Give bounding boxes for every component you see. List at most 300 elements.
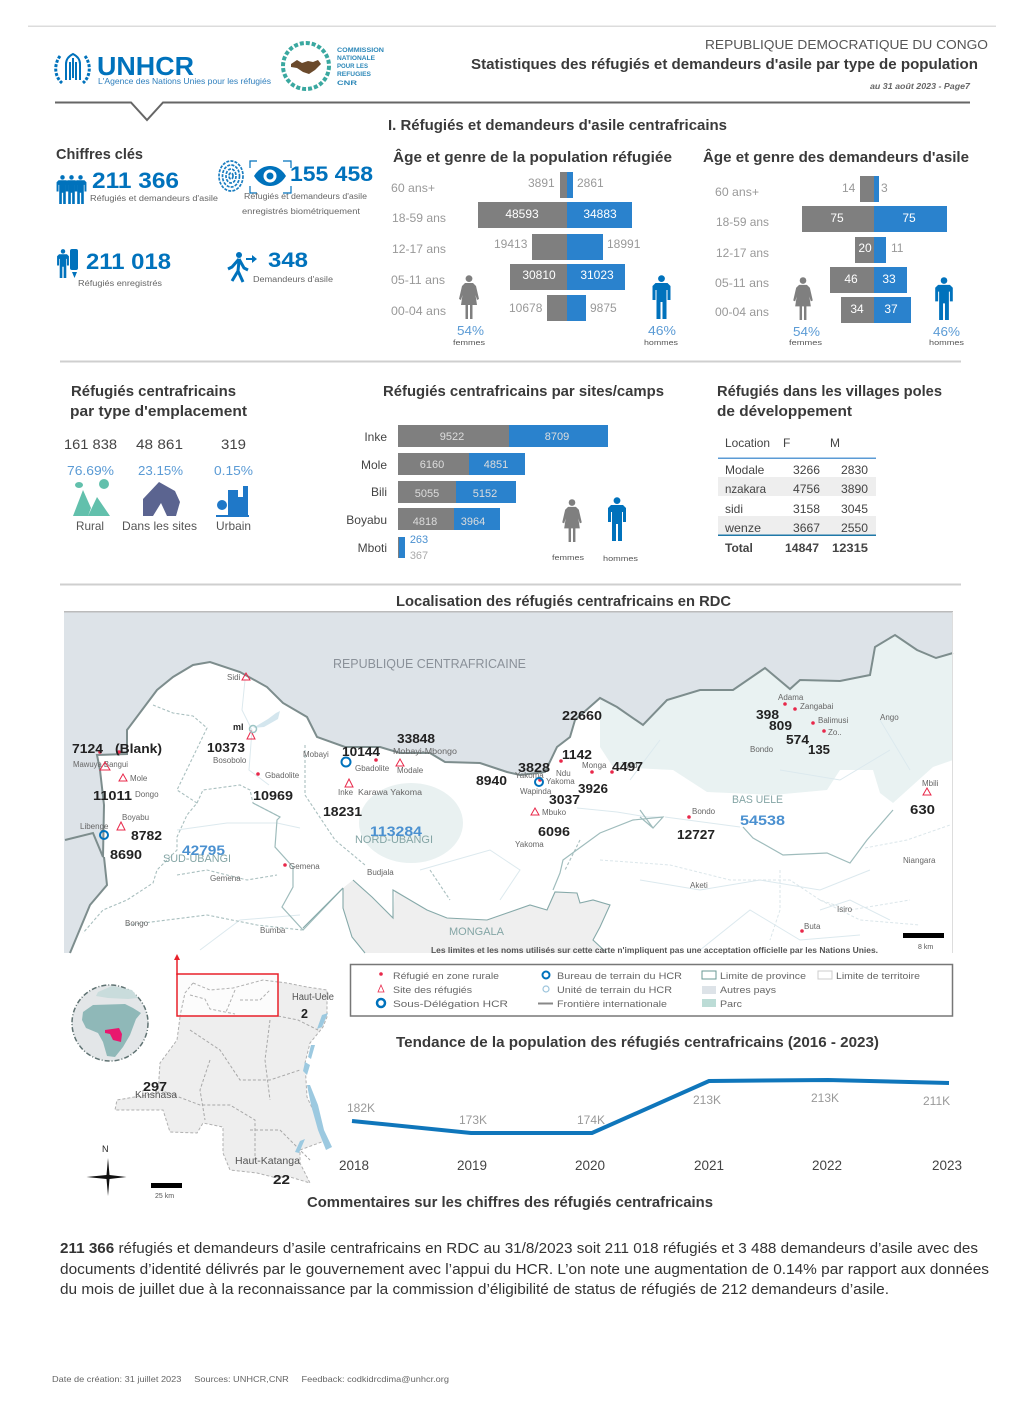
commission logo: POUR LES	[337, 63, 369, 70]
UNHCR logo: L'Agence des Nations Unies pour les réfugiés	[98, 76, 271, 86]
province figures: 113284	[370, 823, 422, 839]
place labels: Yakoma	[546, 777, 575, 786]
values: 46	[844, 272, 858, 286]
legend text: Frontière internationale	[557, 999, 667, 1010]
values: 367	[410, 550, 428, 562]
legend labels	[552, 553, 638, 563]
inset scale bar: 25 km	[155, 1193, 174, 1200]
map figures: 8690	[110, 848, 142, 862]
counts: 161 838	[64, 436, 117, 452]
values: 31023	[580, 268, 614, 282]
province labels: SUD-UBANGI	[163, 853, 231, 865]
years	[339, 1158, 962, 1173]
counts: 48 861	[136, 436, 183, 452]
heading: par type d'emplacement	[70, 403, 247, 420]
map figures: 22660	[562, 709, 602, 723]
province limits	[83, 705, 580, 933]
age labels: 18-59 ans	[392, 211, 446, 225]
heading: Réfugiés centrafricains par sites/camps	[383, 383, 664, 400]
icon: woman	[459, 275, 479, 319]
legend text: Réfugié en zone rurale	[393, 971, 499, 982]
map legend	[350, 964, 952, 1016]
place labels: Gemena	[210, 874, 241, 883]
column heads	[725, 436, 840, 450]
province labels: NORD-UBANGI	[355, 834, 433, 846]
map figures: 6096	[538, 825, 570, 839]
compass: N	[102, 1144, 108, 1154]
column heads: M	[830, 436, 840, 450]
legend text: Parc	[720, 999, 742, 1010]
section heading: I. Réfugiés et demandeurs d'asile centrafricains	[388, 117, 727, 134]
values: 3964	[461, 516, 485, 528]
footer: Date de création: 31 juillet 2023 Sources: UNHCR,CNR Feedback: codkidrcdima@unhcr.org	[52, 1374, 449, 1384]
years: 2022	[812, 1158, 842, 1173]
map figures: 4497	[612, 760, 643, 774]
place labels: Mole	[130, 774, 148, 783]
labels: Urbain	[216, 519, 251, 533]
values: 48593	[505, 207, 539, 221]
inset labels	[135, 992, 334, 1167]
icon: sites	[143, 482, 180, 516]
Bas Uele park	[600, 635, 953, 803]
panel: key figures: Réfugiés enregistrés	[78, 279, 162, 288]
scale bar: 8 km	[918, 944, 933, 951]
map figures: 18231	[323, 805, 362, 819]
site labels: Mole	[361, 458, 387, 472]
years: 2019	[457, 1158, 487, 1173]
map figures	[72, 708, 935, 862]
rows: Modale	[725, 463, 765, 477]
years: 2020	[575, 1158, 605, 1173]
values: 14	[842, 181, 856, 195]
lake	[253, 711, 280, 728]
place labels: Dongo	[135, 790, 159, 799]
heading: Réfugiés centrafricains	[71, 383, 236, 400]
inset labels: Kinshasa	[135, 1090, 177, 1101]
chart: refugee pyramid	[391, 148, 678, 347]
site labels: Bili	[371, 485, 387, 499]
share women: femmes	[789, 338, 822, 347]
heading: Âge et genre de la population réfugiée	[393, 148, 672, 166]
counts: 319	[221, 436, 246, 452]
rows: sidi	[725, 502, 743, 516]
place labels: Modale	[397, 766, 424, 775]
compass	[86, 1144, 126, 1196]
age labels: 18-59 ans	[716, 215, 769, 229]
paragraph	[60, 1241, 989, 1298]
panel: key figures: enregistrés biométriquement	[242, 207, 361, 216]
values: 20	[858, 241, 872, 255]
commission logo	[283, 43, 384, 89]
values: 3	[881, 181, 888, 195]
map heading: Localisation des réfugiés centrafricains en RDC	[396, 593, 731, 610]
icon: urban	[216, 486, 249, 517]
column heads: F	[783, 436, 790, 450]
share men: 46%	[933, 324, 960, 339]
site markers	[100, 673, 931, 830]
age labels: 05-11 ans	[391, 273, 445, 287]
values: 4818	[413, 516, 437, 528]
labels: Dans les sites	[122, 519, 197, 533]
icon: fingerprint	[219, 161, 243, 191]
place labels: Sidi	[227, 673, 241, 682]
place labels: Bondo	[692, 807, 716, 816]
values: 37	[884, 302, 898, 316]
place labels: Isiro	[837, 905, 853, 914]
legend labels: hommes	[603, 554, 638, 563]
DRC outline	[115, 980, 327, 1183]
icon: woman	[793, 277, 813, 320]
heading	[70, 383, 247, 420]
place labels: Zangabai	[800, 702, 834, 711]
icon: man	[608, 497, 626, 541]
panel: key figures: Réfugiés et demandeurs d'asile	[90, 194, 219, 203]
southern area	[343, 880, 610, 953]
legend text: Limite de territoire	[836, 971, 920, 982]
labels: Rural	[76, 519, 104, 533]
share men: hommes	[644, 338, 678, 347]
place labels: Gbadolite	[355, 764, 390, 773]
paragraph: 211 366 réfugiés et demandeurs d’asile centrafricains en RDC au 31/8/2023 soit 211 018 réfugiés et 3 488 demandeurs d’asile avec des	[60, 1241, 978, 1257]
neighbouring countries	[64, 612, 953, 953]
place labels: Adama	[778, 693, 804, 702]
legend text: Sous-Délégation HCR	[393, 999, 508, 1010]
icon: eye scan	[250, 161, 291, 193]
globe locator	[72, 985, 148, 1061]
legend labels: femmes	[552, 553, 584, 562]
data labels: 213K	[693, 1093, 721, 1107]
markers	[377, 971, 832, 1007]
percentages: 0.15%	[214, 463, 253, 478]
place labels: Mbuko	[542, 808, 567, 817]
values: 3891	[528, 176, 555, 190]
page header	[28, 26, 996, 120]
inset figures: 297	[143, 1080, 167, 1094]
province labels: BAS UELE	[732, 794, 783, 806]
commission logo: REFUGIES	[337, 71, 372, 78]
age labels: 60 ans+	[391, 181, 435, 195]
commission logo: CNR	[337, 80, 357, 87]
southern edges	[303, 880, 610, 953]
inset figures	[143, 1007, 308, 1187]
heading: Chiffres clés	[56, 146, 143, 163]
legend text: Autres pays	[720, 985, 776, 996]
inset labels: Haut-Uele	[292, 992, 334, 1003]
years: 2018	[339, 1158, 369, 1173]
office markers	[100, 726, 543, 839]
data labels: 213K	[811, 1091, 839, 1105]
rows: 3266	[793, 463, 820, 477]
panel: key figures: Demandeurs d'asile	[253, 275, 334, 284]
total row: 12315	[832, 541, 868, 555]
site labels	[346, 430, 387, 555]
inset labels: Haut-Katanga	[235, 1156, 300, 1167]
inset figures: 22	[273, 1173, 290, 1187]
place labels: Bongo	[125, 919, 149, 928]
scale bar	[903, 933, 944, 951]
province labels	[163, 794, 783, 938]
values: 34	[850, 302, 864, 316]
icon: people group	[57, 175, 86, 204]
data labels	[347, 1091, 950, 1127]
place labels: Mobayi-Mbongo	[393, 747, 458, 756]
age labels	[391, 181, 446, 318]
values: 263	[410, 534, 428, 546]
heading: Réfugiés dans les villages poles	[717, 383, 942, 400]
age labels: 05-11 ans	[715, 276, 769, 290]
values: 8709	[545, 431, 569, 443]
map figures: 10144	[342, 745, 380, 759]
rivers	[177, 680, 910, 950]
province figures	[182, 812, 785, 858]
province figures: 42795	[182, 842, 225, 858]
bars	[398, 425, 608, 558]
panel: key figures: Réfugiés et demandeurs d'asile	[244, 192, 368, 201]
share women	[453, 323, 485, 347]
panel: key figures	[56, 146, 373, 288]
data labels: 174K	[577, 1113, 605, 1127]
chart: refugees by site	[346, 383, 664, 563]
values: 75	[902, 211, 916, 225]
chart: asylum seeker pyramid	[703, 148, 969, 347]
age labels: 12-17 ans	[392, 242, 446, 256]
legend text: Bureau de terrain du HCR	[557, 971, 682, 982]
place labels: Yakoma	[515, 771, 544, 780]
icon: rural	[73, 479, 110, 516]
data labels: 211K	[923, 1094, 950, 1108]
map figures: 10373	[207, 741, 245, 755]
rows: 3158	[793, 502, 820, 516]
place labels: Mbili	[922, 779, 939, 788]
share men	[644, 323, 678, 347]
values: 34883	[583, 207, 617, 221]
chart: population trend	[339, 1034, 962, 1173]
figure: biometric: 155 458	[290, 163, 373, 186]
rows: 2830	[841, 463, 868, 477]
refugee markers	[98, 702, 826, 933]
figure: asylum seekers: 348	[268, 249, 308, 272]
rows: nzakara	[725, 482, 766, 496]
emblem	[56, 54, 89, 83]
share men: hommes	[929, 338, 964, 347]
values: 9875	[590, 301, 617, 315]
place labels: Aketi	[690, 881, 708, 890]
values: 11	[891, 241, 904, 255]
values: 75	[830, 211, 844, 225]
values	[830, 181, 916, 316]
international border	[65, 635, 953, 953]
place labels	[73, 673, 939, 935]
table: development villages	[717, 383, 942, 555]
place labels: Wapinda	[520, 787, 552, 796]
rows: 2550	[841, 521, 868, 535]
place labels: Karawa Yakoma	[358, 788, 423, 797]
heading: Âge et genre des demandeurs d'asile	[703, 148, 969, 166]
heading	[717, 383, 942, 420]
share women: femmes	[453, 338, 485, 347]
bars	[802, 176, 947, 323]
total row: 14847	[785, 541, 819, 555]
place labels: Budjala	[367, 868, 394, 877]
map figures: 8782	[131, 829, 162, 843]
share women: 54%	[457, 323, 484, 338]
rows	[724, 463, 868, 535]
place labels: Gbadolite	[265, 771, 300, 780]
map figures: 398	[756, 708, 779, 722]
place labels: Monga	[582, 761, 607, 770]
study area frame	[177, 974, 278, 1016]
site labels: Boyabu	[346, 513, 387, 527]
map figures: ml	[233, 722, 244, 732]
paragraph: du mois de juillet due à la reconnaissance par la commission d’éligibilité de status de réfugiés de 212 demandeurs d’asile.	[60, 1282, 889, 1298]
country label: REPUBLIQUE CENTRAFRICAINE	[333, 656, 526, 671]
heading: Commentaires sur les chiffres des réfugiés centrafricains	[307, 1194, 713, 1211]
percentages	[67, 463, 253, 478]
map figures: 135	[808, 743, 830, 757]
inset scale bar	[151, 1183, 182, 1200]
bars	[478, 172, 632, 321]
map figures: 8940	[476, 774, 507, 788]
arrow	[174, 954, 180, 975]
age labels: 00-04 ans	[391, 304, 446, 318]
place labels: Ndu	[556, 769, 571, 778]
map figures: 3926	[578, 782, 608, 796]
Nord-Ubangi park	[359, 783, 463, 863]
rows: wenze	[724, 521, 761, 535]
map figures: 10969	[253, 789, 293, 803]
place labels: Buta	[804, 922, 821, 931]
icon: man	[935, 277, 953, 320]
years: 2021	[694, 1158, 724, 1173]
share men: 46%	[648, 323, 676, 338]
comments section	[60, 1194, 989, 1298]
line	[352, 1080, 949, 1133]
share men	[929, 324, 964, 347]
map figures: 33848	[397, 732, 435, 746]
map figures: 3037	[549, 793, 580, 807]
map figures: (Blank)	[115, 742, 162, 756]
values: 33	[882, 272, 896, 286]
values: 2861	[577, 176, 604, 190]
place labels: Bosobolo	[213, 756, 247, 765]
values: 9522	[440, 431, 464, 443]
study area provinces	[180, 980, 278, 1016]
column heads: Location	[725, 436, 770, 450]
percentages: 23.15%	[138, 463, 183, 478]
labels	[76, 519, 251, 533]
data labels: 182K	[347, 1101, 375, 1115]
icon: asylum seeker walking	[228, 252, 257, 282]
map figures: 3828	[518, 761, 550, 775]
years: 2023	[932, 1158, 962, 1173]
commission logo: COMMISSION	[337, 47, 384, 54]
map: northern DRC	[64, 612, 953, 955]
values: 6160	[420, 459, 444, 471]
map figures: 574	[786, 733, 809, 747]
rows: 3045	[841, 502, 868, 516]
legend text	[393, 971, 920, 1010]
legend text: Limite de province	[720, 971, 806, 982]
age labels: 12-17 ans	[716, 246, 769, 260]
site labels: Mboti	[358, 541, 387, 555]
icon: man	[652, 275, 670, 319]
map figures: 809	[769, 719, 792, 733]
place labels: Zo..	[828, 728, 842, 737]
age labels: 60 ans+	[715, 185, 759, 199]
commission logo: NATIONALE	[337, 55, 376, 62]
values	[494, 176, 641, 315]
place labels: Yakoma	[515, 840, 544, 849]
place labels: Yalo	[622, 761, 638, 770]
province labels: MONGALA	[449, 926, 505, 938]
rows: 4756	[793, 482, 820, 496]
province figures: 54538	[740, 812, 785, 828]
country: REPUBLIQUE DEMOCRATIQUE DU CONGO	[705, 38, 988, 52]
place labels: Bumba	[260, 926, 286, 935]
figure: registered: 211 018	[86, 249, 171, 274]
counts	[64, 436, 246, 452]
place labels: Balimusi	[818, 716, 848, 725]
share women: 54%	[793, 324, 820, 339]
heading: de développement	[717, 403, 852, 420]
values: 5152	[473, 488, 497, 500]
icon: registered refugee	[57, 249, 78, 278]
panel: refugees by location type	[64, 383, 253, 533]
date: au 31 août 2023 - Page7	[870, 81, 971, 91]
total row: Total	[725, 541, 753, 555]
place labels: Mawuya Bangui	[73, 760, 128, 769]
legend text: Site des réfugiés	[393, 985, 472, 996]
inset figures: 2	[301, 1007, 308, 1021]
rows: 3890	[841, 482, 868, 496]
site labels: Inke	[364, 430, 387, 444]
percentages: 76.69%	[67, 463, 114, 478]
values: 4851	[484, 459, 508, 471]
lakes	[295, 1013, 332, 1153]
UNHCR logo: UNHCR	[97, 51, 194, 81]
share women	[789, 324, 822, 347]
title: Statistiques des réfugiés et demandeurs d'asile par type de population	[471, 56, 978, 73]
map figures: 1142	[562, 748, 592, 762]
heading: Tendance de la population des réfugiés centrafricains (2016 - 2023)	[396, 1034, 879, 1051]
place labels: Boyabu	[122, 813, 149, 822]
values	[410, 431, 569, 562]
map figures: 7124	[72, 742, 103, 756]
total row	[725, 541, 868, 555]
inset: DRC overview map	[115, 954, 334, 1187]
age labels: 00-04 ans	[715, 305, 769, 319]
disclaimer: Les limites et les noms utilisés sur cette carte n'impliquent pas une acceptation officielle par les Nations Unies.	[431, 946, 878, 955]
place labels: Inke	[338, 788, 354, 797]
paragraph: documents d’identité délivrés par le gouvernement avec l’appui du HCR. L’on note une augmentation de 0.14% par rapport aux données	[60, 1262, 989, 1278]
map figures: 11011	[93, 789, 132, 803]
age labels	[715, 185, 769, 319]
values: 5055	[415, 488, 439, 500]
place labels: Bondo	[750, 745, 774, 754]
place labels: Niangara	[903, 856, 936, 865]
place labels: Ango	[880, 713, 899, 722]
icon: woman	[562, 499, 582, 542]
values: 18991	[607, 237, 641, 251]
data labels: 173K	[459, 1113, 487, 1127]
place labels: Gemena	[289, 862, 320, 871]
place labels: Mobayi	[303, 750, 329, 759]
legend text: Unité de terrain du HCR	[557, 985, 672, 996]
study area fill	[177, 974, 278, 1016]
rows: 3667	[793, 521, 820, 535]
place labels: Libenge	[80, 822, 109, 831]
map figures: 630	[910, 803, 935, 817]
